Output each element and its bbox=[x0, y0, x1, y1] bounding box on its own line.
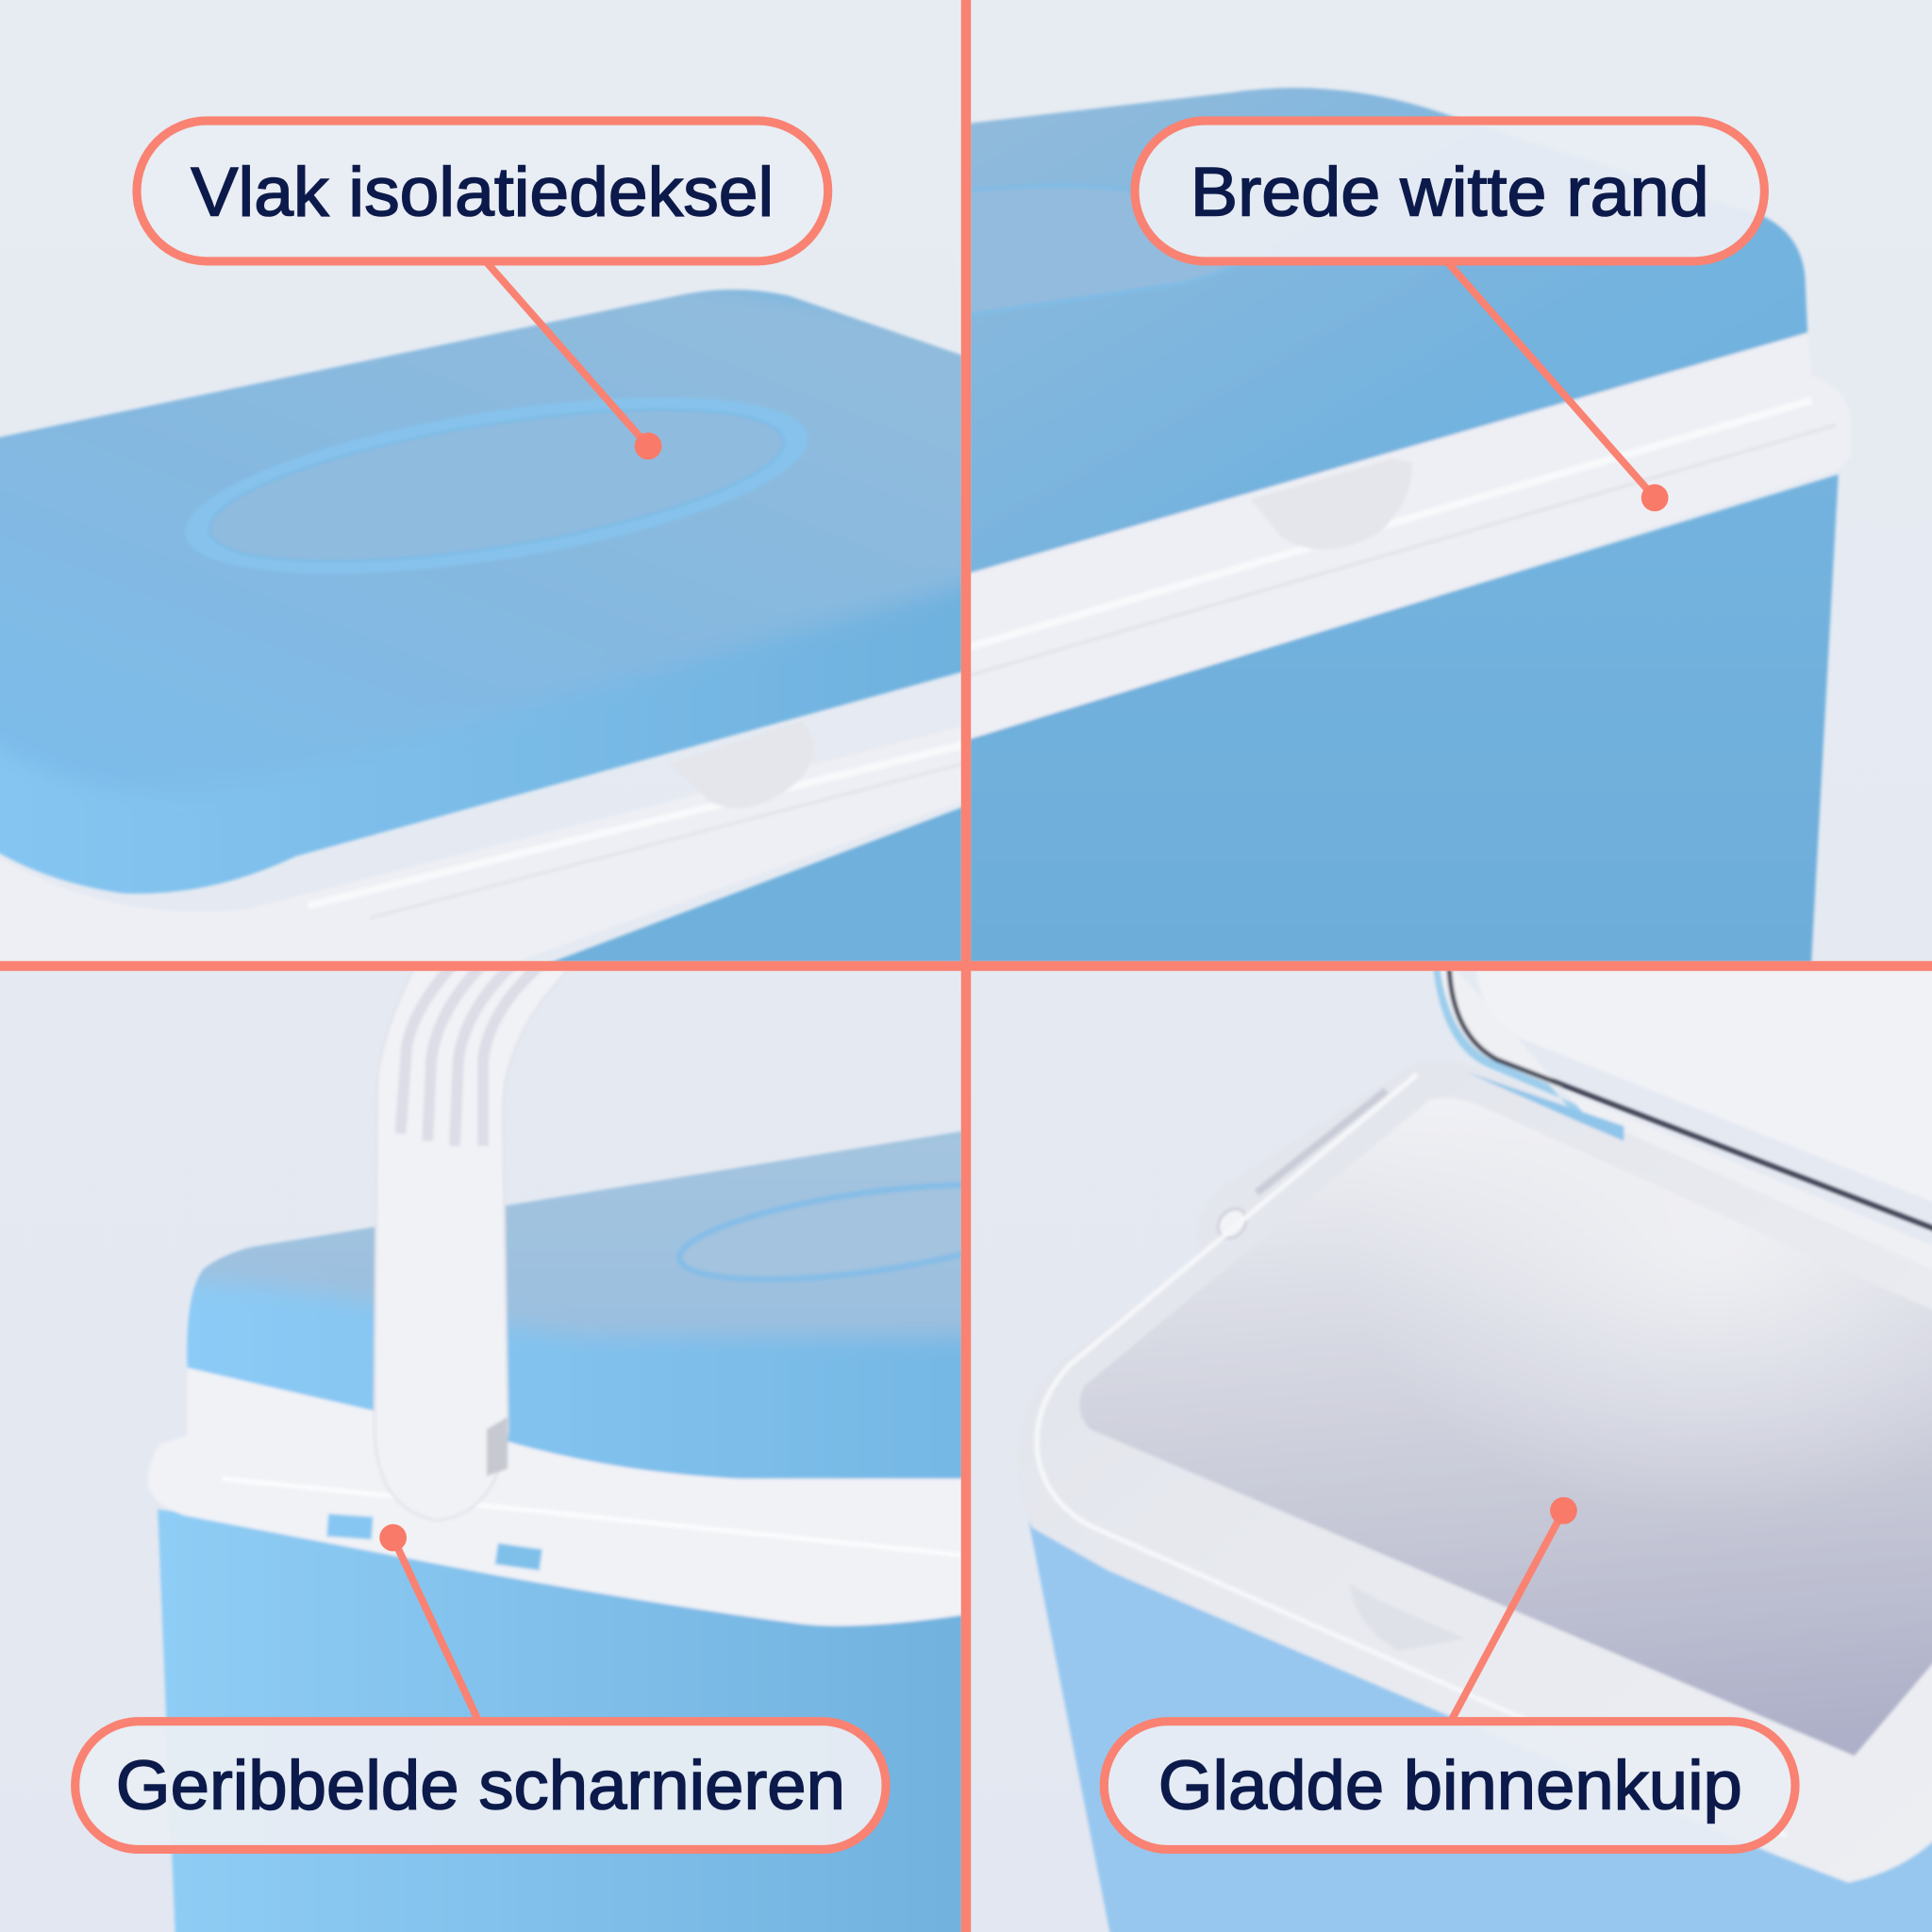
divider: vertical bbox=[961, 0, 971, 1932]
callout: Brede witte rand: Brede witte rand bbox=[1191, 155, 1709, 231]
callout: Vlak isolatiedeksel bbox=[137, 121, 828, 459]
callout: Vlak isolatiedeksel: Vlak isolatiedeksel bbox=[191, 155, 774, 231]
divider: horizontal bbox=[0, 961, 1932, 971]
callout: Geribbelde scharnieren: Geribbelde scharnieren bbox=[116, 1747, 845, 1824]
icon: carrying handle bbox=[372, 972, 564, 1521]
callout: Brede witte rand bbox=[1135, 121, 1764, 511]
photo: rim close-up bbox=[949, 88, 1851, 986]
icon: hinge right bbox=[495, 1543, 542, 1571]
callout: Gladde binnenkuip bbox=[1104, 1497, 1795, 1849]
callout: Gladde binnenkuip: Gladde binnenkuip bbox=[1158, 1747, 1742, 1824]
panel: flat insulation lid bbox=[0, 277, 986, 986]
photo: lid close-up bbox=[0, 277, 986, 986]
panel: smooth inner tub bbox=[1017, 949, 1932, 1932]
panel: ribbed hinges bbox=[149, 972, 961, 1932]
photo: handle and hinges bbox=[149, 972, 961, 1932]
panel: wide white rim bbox=[949, 88, 1851, 986]
icon: hinge left bbox=[327, 1514, 373, 1540]
icon: side handle pivot bbox=[1217, 1208, 1247, 1240]
icon: side handle groove bbox=[1257, 1091, 1386, 1192]
photo: open cool box bbox=[1017, 949, 1932, 1932]
callout: Geribbelde scharnieren bbox=[75, 1524, 886, 1849]
